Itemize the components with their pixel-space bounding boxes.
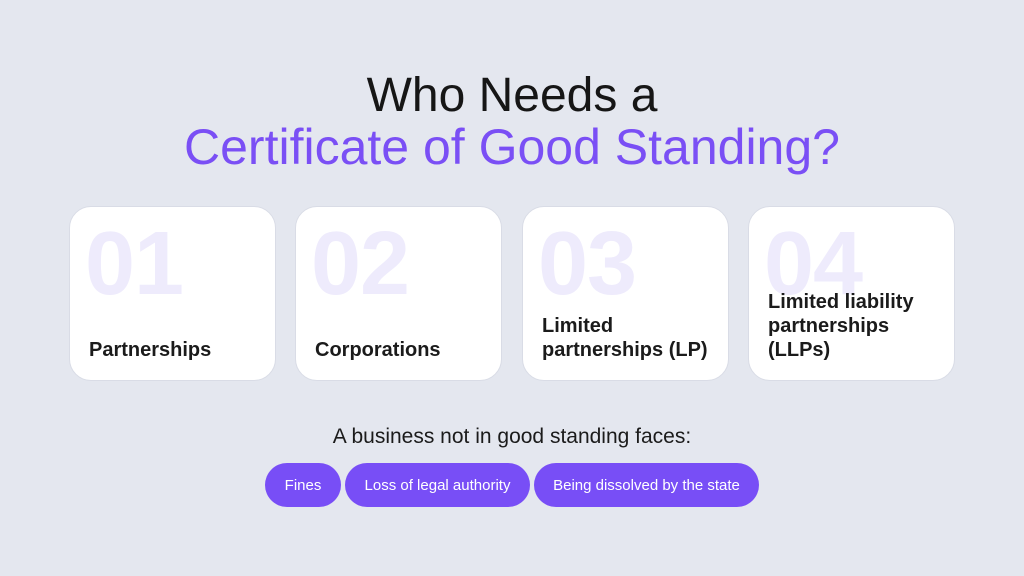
card 04: 04 bbox=[764, 214, 862, 314]
pill: fines: Fines bbox=[285, 477, 321, 494]
card 03 bbox=[522, 206, 729, 381]
card 04: Limited liability bbox=[768, 291, 914, 313]
card 03: 03 bbox=[538, 214, 636, 314]
card 01 bbox=[69, 206, 276, 381]
card 03: partnerships (LP) bbox=[542, 339, 708, 361]
card 01: Partnerships bbox=[89, 339, 211, 361]
card 02: Corporations bbox=[315, 339, 441, 361]
pill: loss of legal authority bbox=[345, 463, 530, 507]
title: Who Needs a bbox=[367, 69, 657, 122]
card 04 bbox=[748, 206, 955, 381]
pill: fines bbox=[265, 463, 341, 507]
pill: dissolved: Being dissolved by the state bbox=[553, 477, 740, 494]
card 03: Limited bbox=[542, 315, 613, 337]
card 04: (LLPs) bbox=[768, 339, 830, 361]
card 04: partnerships bbox=[768, 315, 889, 337]
pill: loss of legal authority: Loss of legal authority bbox=[365, 477, 510, 494]
subtitle highlighted: Certificate of Good Standing? bbox=[184, 119, 840, 175]
card 01: 01 bbox=[85, 214, 183, 314]
consequences heading: A business not in good standing faces: bbox=[333, 425, 691, 448]
pill: dissolved bbox=[534, 463, 759, 507]
card 02 bbox=[295, 206, 502, 381]
card 02: 02 bbox=[311, 214, 409, 314]
